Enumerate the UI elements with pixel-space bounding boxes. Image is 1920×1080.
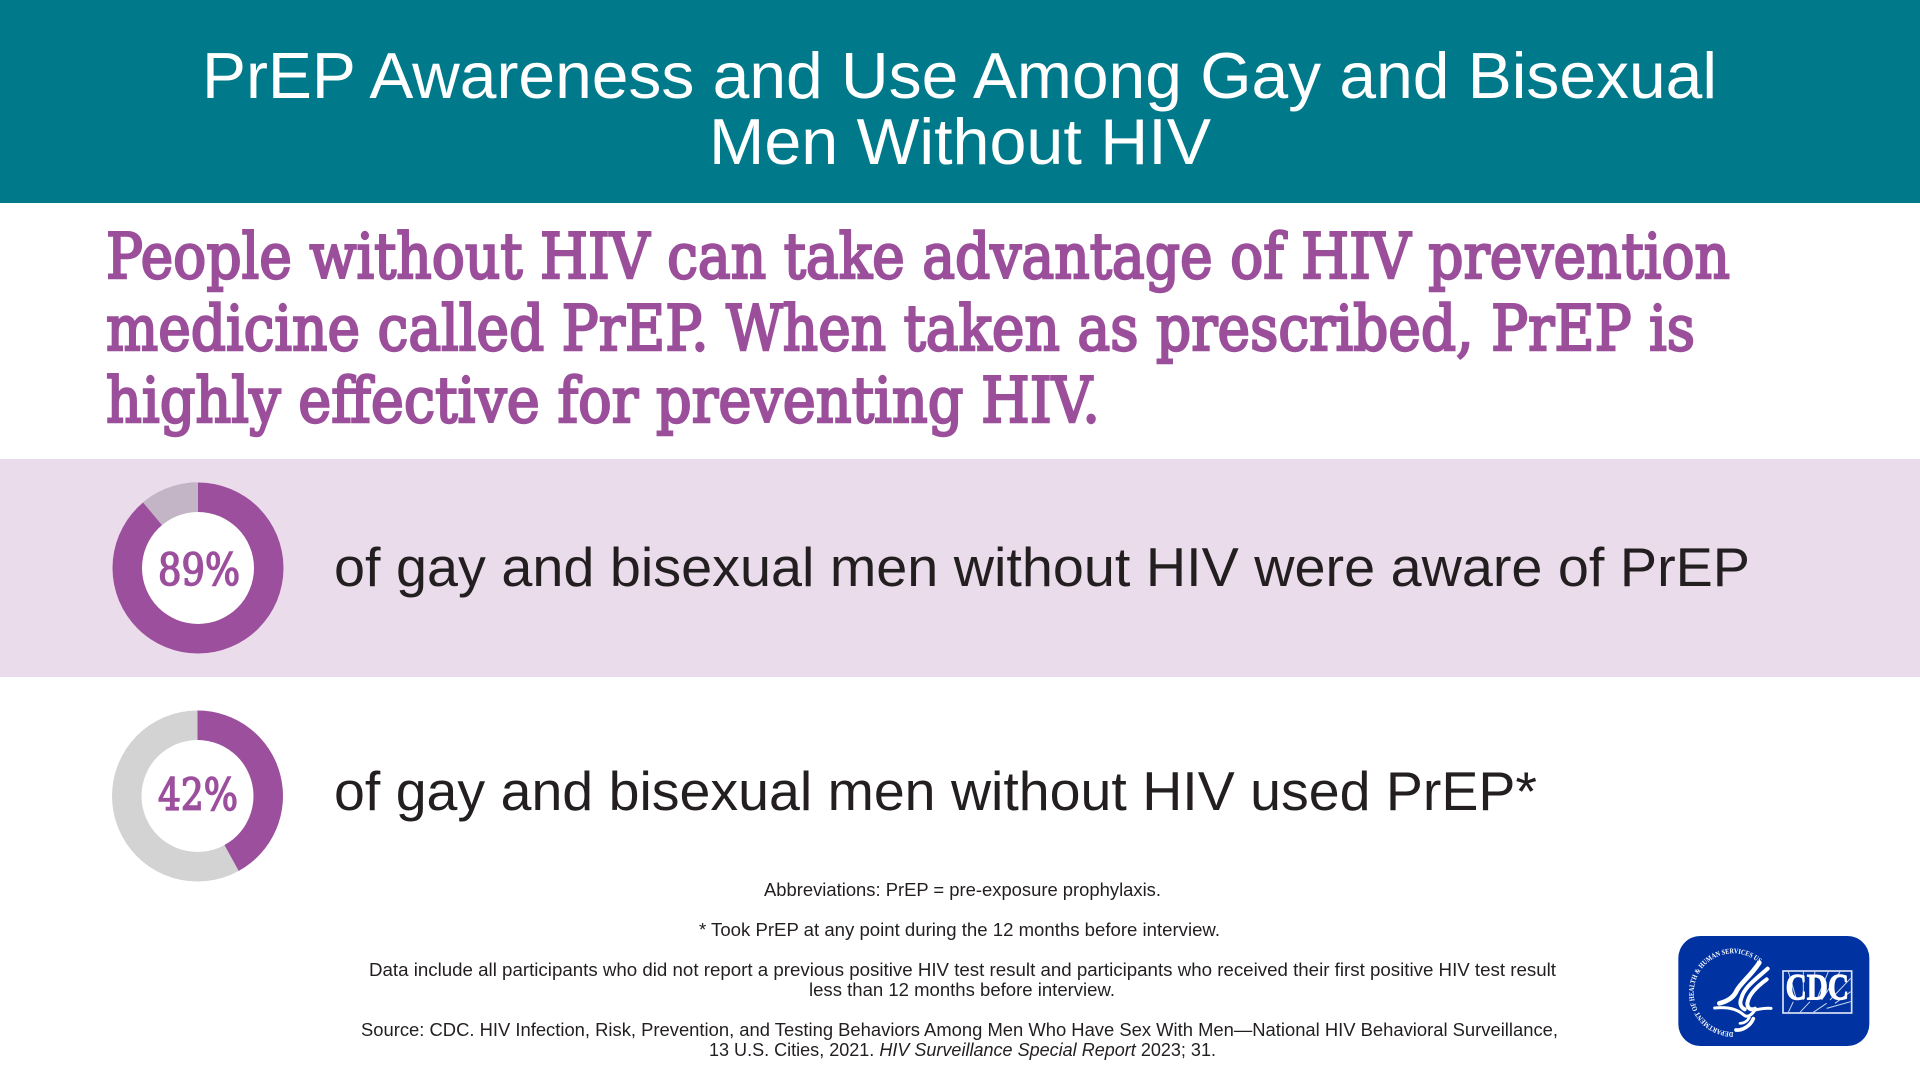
- icon: HHS eagle: [1715, 963, 1771, 1030]
- footnotes: [361, 879, 1558, 1060]
- donut chart: 89%: [112, 482, 284, 654]
- footnotes: Data include all participants who did not report a previous positive HIV test result and participants who received their first positive HIV test result: [369, 959, 1556, 980]
- donut chart: 89%: 89%: [158, 545, 240, 596]
- intro statement: People without HIV can take advantage of HIV prevention: [106, 220, 1730, 293]
- icon: HHS and CDC logo: [1678, 936, 1870, 1046]
- title: [202, 39, 1717, 178]
- donut chart: 42%: 42%: [158, 770, 238, 821]
- intro statement: highly effective for preventing HIV.: [106, 364, 1100, 437]
- panel: use row: [112, 710, 1537, 882]
- title: Men Without HIV: [709, 105, 1212, 178]
- footnotes: 13 U.S. Cities, 2021. HIV Surveillance Special Report 2023; 31.: [709, 1039, 1216, 1060]
- footnotes: less than 12 months before interview.: [809, 979, 1115, 1000]
- title: PrEP Awareness and Use Among Gay and Bisexual: [202, 39, 1717, 112]
- panel: awareness band: [0, 459, 1920, 677]
- donut chart: 42%: [112, 710, 283, 882]
- intro statement: [106, 220, 1730, 437]
- header banner: [0, 0, 1920, 203]
- footnotes: Abbreviations: PrEP = pre-exposure prophylaxis.: [764, 879, 1161, 900]
- icon: CDC box: CDC: [1786, 967, 1849, 1008]
- footnotes: Source: CDC. HIV Infection, Risk, Prevention, and Testing Behaviors Among Men Who Have Sex With Men—National HIV Behavioral Surveillance,: [361, 1019, 1558, 1040]
- icon: HHS seal lettering: DEPARTMENT OF HEALTH & HUMAN SERVICES USA: [1688, 948, 1762, 1037]
- statement: aware of PrEP: of gay and bisexual men without HIV were aware of PrEP: [334, 536, 1750, 598]
- icon: HHS seal lettering: [1688, 948, 1762, 1037]
- footnotes: * Took PrEP at any point during the 12 months before interview.: [699, 919, 1220, 940]
- intro statement: medicine called PrEP. When taken as prescribed, PrEP is: [106, 292, 1695, 365]
- statement: used PrEP: of gay and bisexual men without HIV used PrEP*: [334, 760, 1537, 822]
